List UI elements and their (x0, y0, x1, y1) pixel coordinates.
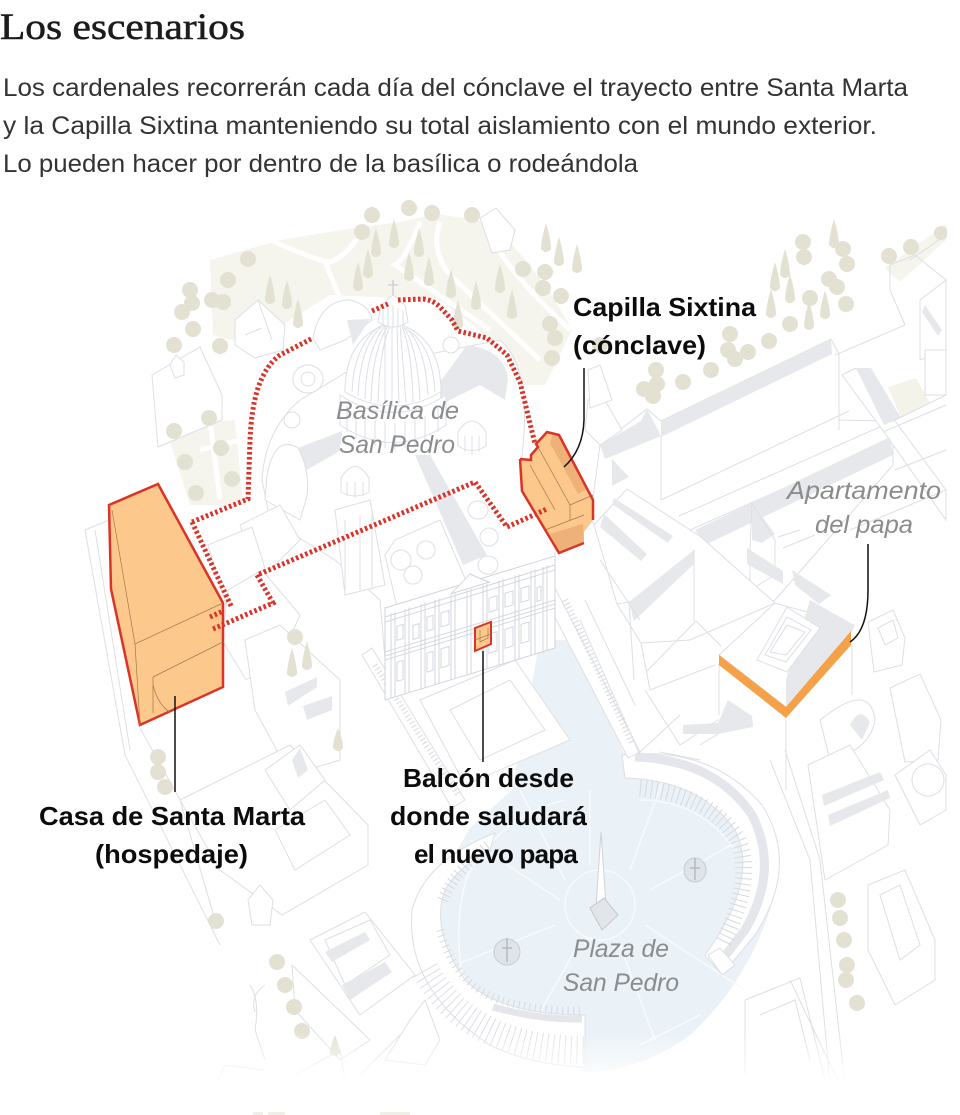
route around the basilica (outside) (192, 299, 535, 608)
label: Apartamento del papa: del papa (815, 511, 913, 539)
label: Apartamento del papa (785, 477, 941, 539)
label: Balcón: donde saludará (390, 801, 588, 831)
intro text (3, 74, 908, 178)
map: east palace buildings (590, 235, 946, 620)
label: Plaza de San Pedro: Plaza de (573, 935, 669, 963)
label: Basílica de San Pedro: San Pedro (339, 431, 455, 459)
route through the basilica (inside) (210, 482, 547, 629)
highlight: balcony (475, 622, 491, 651)
map: gardens (165, 214, 946, 505)
label: Casa de Santa Marta: (hospedaje) (95, 839, 248, 869)
map: Sistine wing and courtyard (585, 365, 831, 760)
map: east buildings (745, 610, 946, 1085)
label: Casa de Santa Marta: Casa de Santa Marta (39, 801, 306, 831)
side chapels (240, 444, 470, 620)
intro text: y la Capilla Sixtina manteniendo su total aislamiento con el mundo exterior. (3, 112, 877, 140)
label: Capilla Sixtina (573, 292, 757, 360)
secondary domes (284, 337, 498, 584)
fountains (494, 858, 706, 965)
map: trees (150, 200, 948, 1056)
highlight: Capilla Sixtina (520, 432, 593, 553)
label: Casa de Santa Marta (39, 801, 306, 869)
title: Los escenarios (0, 7, 245, 48)
label: Balcón: el nuevo papa (414, 839, 578, 869)
label: Balcón (390, 763, 588, 869)
map bottom fade overlay (0, 1030, 960, 1085)
label: Plaza de San Pedro: San Pedro (563, 969, 679, 997)
apartment floor highlight (719, 631, 851, 718)
map: corridors to square (362, 590, 640, 808)
map right edge mask (947, 200, 960, 1100)
map: south-west buildings (180, 745, 440, 1080)
obelisk (590, 832, 618, 930)
leader lines (175, 368, 868, 792)
label: Basílica de San Pedro (336, 397, 459, 459)
dome (340, 280, 446, 449)
map: west buildings (85, 208, 515, 945)
map: colonnade (411, 754, 779, 1067)
highlight: Casa de Santa Marta (109, 484, 223, 725)
label: Apartamento del papa: Apartamento (785, 477, 941, 505)
label: Basílica de San Pedro: Basílica de (336, 397, 459, 425)
label: Capilla Sixtina: (cónclave) (573, 330, 706, 360)
intro text: Los cardenales recorrerán cada día del cónclave el trayecto entre Santa Marta (3, 74, 908, 102)
map: St Peter's Square (430, 640, 774, 1072)
map: Apostolic Palace (719, 600, 854, 790)
bottom map remnant (253, 1112, 410, 1115)
facade (385, 548, 555, 700)
label: Plaza de San Pedro (563, 935, 679, 997)
map: St Peter's Basilica (240, 280, 555, 700)
intro text: Lo pueden hacer por dentro de la basílica o rodeándola (3, 150, 638, 178)
map bottom mask (0, 1085, 960, 1115)
label: Capilla Sixtina: Capilla Sixtina (573, 292, 757, 322)
label: Balcón: Balcón desde (403, 763, 574, 793)
